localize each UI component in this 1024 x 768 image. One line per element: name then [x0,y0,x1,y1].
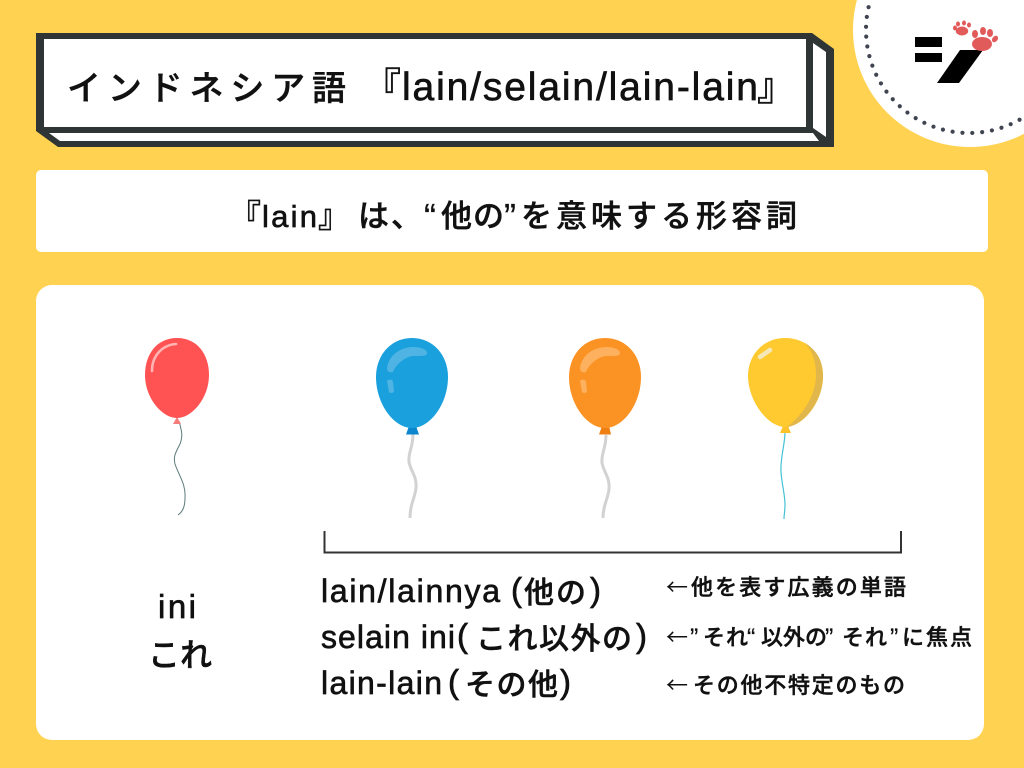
title [67,66,795,109]
note: lain-lain: その他不特定のもの [693,673,905,698]
subtitle text: 他の [441,199,505,234]
term: lain-lain: ) [560,663,571,700]
subtitle text: ” [504,196,516,237]
note: selain ini: ” [690,624,698,652]
title: 『 [363,67,401,109]
title: 』 [757,67,795,109]
note: selain ini: ← [666,620,688,652]
subtitle text: を意味する形容詞 [521,199,797,234]
subtitle text: は、 [358,199,422,234]
term: selain ini: selain ini [321,619,455,655]
note: selain ini: に焦点 [902,625,972,650]
bracket [324,531,901,552]
subtitle panel [36,170,988,252]
note: selain ini [666,620,972,652]
note: selain ini: 以外の [761,625,827,650]
term: lain-lain: その他 [465,669,560,702]
term: selain ini: ) [636,617,647,654]
title: インドネシア語 [67,70,346,108]
title: lain/selain/lain-lain [402,66,758,109]
balloon: yellow [748,338,823,519]
main panel [36,285,984,740]
note: selain ini: ” [825,624,833,652]
term: lain/lainnya: lain/lainnya [321,573,500,609]
term: lain-lain: lain-lain [321,665,442,701]
subtitle text: “ [424,196,436,237]
note: selain ini: それ [703,625,749,650]
term: lain/lainnya: 他の [524,577,588,610]
label: kore: これ [148,637,212,673]
term: selain ini: これ以外の [476,623,634,656]
note: lain-lain: ← [666,668,688,700]
note: lain-lain [666,668,905,700]
term: lain-lain: ( [448,663,459,700]
balloon: orange [569,338,641,518]
label: ini: ini [158,588,196,625]
subtitle text: lain [262,199,317,234]
note: selain ini: それ [842,625,888,650]
note: lain/lainnya: 他を表す広義の単語 [691,575,906,600]
term: selain ini: ( [457,617,468,654]
term: lain/lainnya: ) [590,571,601,608]
note: lain/lainnya [666,570,906,602]
subtitle text [229,196,797,237]
balloon: blue [376,338,448,518]
title box [36,33,834,147]
note: selain ini: “ [747,624,755,652]
term: lain-lain [321,663,571,702]
logo badge [853,0,1024,147]
term: lain/lainnya [321,571,601,610]
subtitle text: 』 [318,198,350,234]
note: lain/lainnya: ← [666,570,688,602]
term: selain ini [321,617,647,656]
subtitle text: 『 [229,198,261,234]
note: selain ini: ” [890,624,898,652]
balloon: red [145,338,209,515]
term: lain/lainnya: ( [511,571,522,608]
